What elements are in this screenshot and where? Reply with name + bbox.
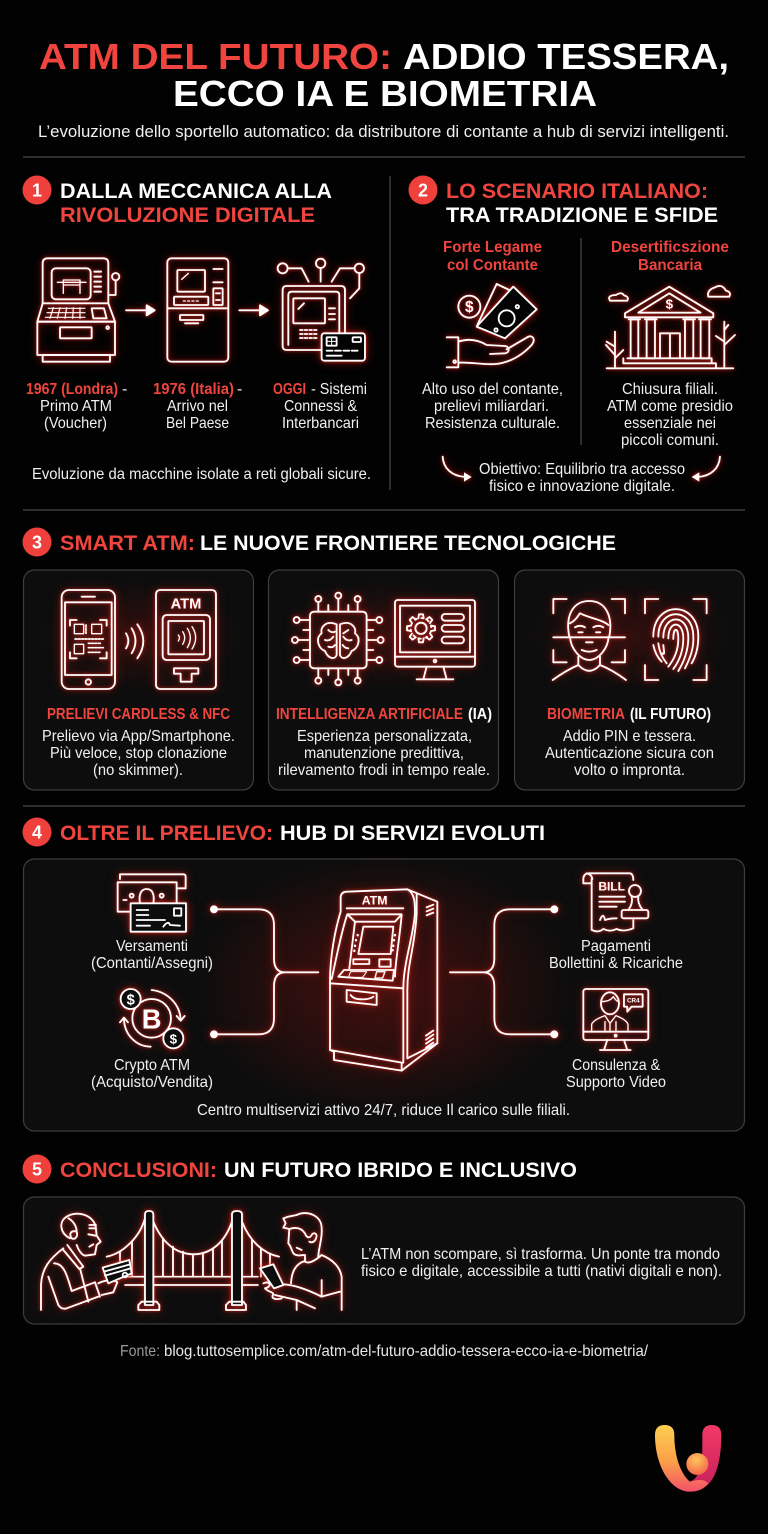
section 3 heading: SMART ATM:	[60, 532, 195, 555]
panel: conclusion	[24, 1197, 744, 1324]
text: bank	[607, 381, 733, 449]
icon: brain chip	[292, 593, 384, 685]
icon: 1967 ATM	[37, 258, 119, 362]
evolution note: Evoluzione da macchine isolate a reti globali sicure.	[32, 466, 371, 483]
icon: crypto: $	[127, 992, 135, 1008]
icon: face scan	[553, 599, 626, 680]
card title: (IA)	[468, 706, 492, 723]
text: cash: prelievi miliardari.	[434, 398, 549, 415]
labels: timeline: Interbancari	[282, 415, 359, 432]
text: bank: Chiusura filiali.	[622, 381, 718, 398]
icon: bank	[606, 286, 735, 368]
icon: central ATM	[330, 889, 437, 1071]
conclusion text: fisico e digitale, accessibile a tutti (nativi digitali e non).	[361, 1263, 722, 1280]
objective: fisico e innovazione digitale.	[489, 478, 675, 495]
icon: crypto	[120, 989, 185, 1048]
panel: biometrics	[514, 570, 744, 790]
card text: Prelievo via App/Smartphone.	[42, 728, 235, 745]
icon: connected ATM and card	[278, 259, 365, 361]
card title: BIOMETRIA	[547, 706, 625, 723]
section 1 heading	[22, 176, 332, 227]
title: ATM DEL FUTURO:	[39, 36, 392, 77]
section 4 heading: HUB DI SERVIZI EVOLUTI	[280, 822, 545, 845]
icon: fingerprint	[645, 599, 707, 680]
card text: rilevamento frodi in tempo reale.	[278, 762, 490, 779]
conclusion text: L’ATM non scompare, sì trasforma. Un ponte tra mondo	[361, 1246, 720, 1263]
subheading: bank desert: Desertificszione	[611, 239, 729, 256]
labels: timeline: (Voucher)	[44, 415, 107, 432]
icon: bill: BILL	[598, 879, 625, 893]
icon: video advisor	[583, 989, 648, 1050]
label: Pagamenti	[581, 938, 651, 955]
subheading: cash	[443, 239, 542, 274]
card title	[547, 706, 711, 723]
panel: AI	[268, 570, 498, 790]
card title: PRELIEVI CARDLESS & NFC	[47, 706, 230, 723]
objective: Obiettivo: Equilibrio tra accesso	[479, 461, 685, 478]
section 3 heading: LE NUOVE FRONTIERE TECNOLOGICHE	[200, 532, 616, 555]
subheading: bank desert: Bancaria	[638, 257, 702, 274]
subtitle: L’evoluzione dello sportello automatico: da distributore di contante a hub di servizi intelligenti.	[38, 122, 729, 141]
section 2 heading: 2	[418, 180, 428, 200]
section 4 heading: OLTRE IL PRELIEVO:	[60, 822, 273, 845]
card text: Autenticazione sicura con	[545, 745, 714, 762]
labels: timeline: Connessi &	[284, 398, 357, 415]
label	[91, 938, 213, 972]
title: ECCO IA E BIOMETRIA	[173, 73, 597, 114]
card text	[42, 728, 235, 779]
section 3 heading: 3	[32, 532, 42, 552]
icon: bridge	[107, 1211, 279, 1310]
section 2 heading	[408, 176, 718, 227]
section 1 heading: RIVOLUZIONE DIGITALE	[60, 204, 315, 227]
subheading: bank desert	[611, 239, 729, 274]
connector right	[450, 906, 557, 1037]
section 2 heading: LO SCENARIO ITALIANO:	[446, 180, 708, 203]
labels: timeline	[26, 381, 367, 432]
card text	[278, 728, 490, 779]
card text: volto o impronta.	[574, 762, 685, 779]
arrow: left curved	[443, 457, 472, 482]
panel: services hub	[24, 855, 744, 1131]
icon: hand with money: $	[465, 299, 474, 316]
arrow: right curved	[692, 457, 720, 482]
icon: hand with money	[447, 284, 537, 367]
labels: timeline: OGGI	[273, 381, 306, 398]
label: (Acquisto/Vendita)	[91, 1074, 213, 1091]
text: bank: essenziale nei	[624, 415, 716, 432]
icon: bill	[583, 873, 648, 931]
label	[91, 1057, 213, 1091]
card text: Più veloce, stop clonazione	[50, 745, 227, 762]
section 5 heading: 5	[32, 1160, 42, 1180]
card text: Esperienza personalizzata,	[297, 728, 472, 745]
arrow	[239, 305, 268, 315]
section 5 heading	[22, 1154, 577, 1184]
icon: older person with card	[41, 1214, 132, 1310]
section 4 heading	[22, 818, 545, 846]
source: Fonte:	[120, 1343, 160, 1360]
icon: cash and check	[118, 874, 186, 932]
connector left	[211, 906, 318, 1037]
section 5 heading: UN FUTURO IBRIDO E INCLUSIVO	[224, 1159, 577, 1182]
label: Crypto ATM	[114, 1057, 190, 1074]
label: Supporto Video	[566, 1074, 666, 1091]
text: bank: piccoli comuni.	[621, 432, 719, 449]
section 5 heading: CONCLUSIONI:	[60, 1159, 217, 1182]
section 1 heading: DALLA MECCANICA ALLA	[60, 180, 332, 203]
icon: central ATM: ATM	[362, 893, 388, 907]
section 2 heading: TRA TRADIZIONE E SFIDE	[446, 204, 718, 227]
card text: (no skimmer).	[93, 762, 183, 779]
subheading: cash: Forte Legame	[443, 239, 542, 256]
icon: video advisor: CR4	[627, 998, 640, 1005]
card title: INTELLIGENZA ARTIFICIALE	[276, 706, 463, 723]
labels: timeline: Bel Paese	[166, 415, 229, 432]
objective	[479, 461, 685, 495]
card text: Addio PIN e tessera.	[563, 728, 696, 745]
labels: timeline: Arrivo nel	[167, 398, 228, 415]
source: blog.tuttosemplice.com/atm-del-futuro-addio-tessera-ecco-ia-e-biometria/	[164, 1343, 649, 1360]
labels: timeline: Primo ATM	[40, 398, 112, 415]
label: Consulenza &	[572, 1057, 660, 1074]
hub note: Centro multiservizi attivo 24/7, riduce Il carico sulle filiali.	[197, 1102, 570, 1119]
title: ADDIO TESSERA,	[403, 36, 729, 77]
label: Bollettini & Ricariche	[549, 955, 683, 972]
label	[566, 1057, 666, 1091]
icon: phone and ATM NFC	[62, 590, 216, 689]
title	[39, 36, 729, 114]
section 1 heading: 1	[32, 180, 42, 200]
text: cash: Alto uso del contante,	[422, 381, 563, 398]
text: cash	[422, 381, 563, 432]
label: (Contanti/Assegni)	[91, 955, 213, 972]
card text	[545, 728, 714, 779]
conclusion text	[361, 1246, 722, 1280]
logo	[655, 1425, 721, 1492]
labels: timeline: -	[122, 381, 127, 398]
text: cash: Resistenza culturale.	[425, 415, 560, 432]
labels: timeline: -	[237, 381, 242, 398]
section 3 heading	[22, 528, 616, 556]
card title: (IL FUTURO)	[630, 706, 711, 723]
icon: crypto: $	[170, 1031, 178, 1046]
icon: monitor with gear	[395, 600, 475, 679]
card text: manutenzione predittiva,	[304, 745, 464, 762]
icon: phone and ATM NFC: ATM	[171, 596, 201, 612]
panel: cardless	[24, 570, 254, 790]
icon: crypto: B	[142, 1003, 162, 1034]
labels: timeline: - Sistemi	[311, 381, 367, 398]
icon: bank: $	[666, 297, 674, 312]
icon: young person with phone	[260, 1213, 342, 1310]
arrow	[126, 305, 155, 315]
icon: 1976 ATM	[167, 258, 228, 362]
label: Versamenti	[116, 938, 188, 955]
subheading: cash: col Contante	[447, 257, 538, 274]
label	[549, 938, 683, 972]
section 4 heading: 4	[32, 822, 42, 842]
labels: timeline: 1967 (Londra)	[26, 381, 118, 398]
text: bank: ATM come presidio	[607, 398, 733, 415]
labels: timeline: 1976 (Italia)	[153, 381, 234, 398]
